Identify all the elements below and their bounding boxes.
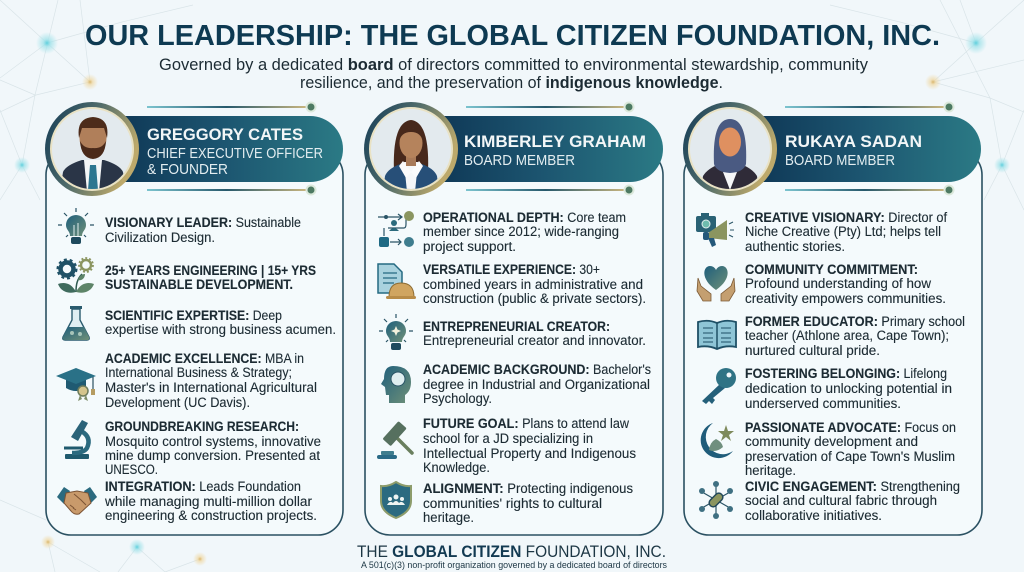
text: academic background	[423, 362, 651, 406]
text: groundbreaking research	[105, 419, 321, 477]
text: academic background: Psychology.	[423, 391, 492, 406]
text: fostering belonging	[745, 366, 952, 411]
text: academic excellence	[105, 351, 317, 410]
text: versatile experience: VERSATILE EXPERIENCE: 30+	[423, 262, 600, 277]
subtitle: resilience, and the preservation of indigenous knowledge.	[300, 73, 723, 92]
text: former educator: teacher (Athlone area, Cape Town);	[745, 328, 949, 343]
icon: microscope	[64, 420, 89, 459]
bullet: civic engagement	[699, 479, 960, 523]
text: versatile experience	[423, 262, 646, 306]
text: entrepreneurial creator	[423, 319, 646, 348]
icon: heart in hands	[697, 266, 735, 301]
text: passionate advocate: heritage.	[745, 463, 796, 478]
text: future goal: school for a JD specializing in	[423, 431, 593, 446]
text: academic background: degree in Industrial and Organizational	[423, 377, 650, 392]
text: groundbreaking research: GROUNDBREAKING RESEARCH:	[105, 419, 299, 434]
footer: THE GLOBAL CITIZEN FOUNDATION, INC.	[357, 542, 666, 561]
text: groundbreaking research: UNESCO.	[105, 462, 158, 477]
subtitle: Governed by a dedicated board of directors committed to environmental stewardship, community	[159, 55, 868, 74]
bullet: creative visionary	[696, 210, 947, 254]
text: creative visionary: CREATIVE VISIONARY: Director of	[745, 210, 947, 225]
icon: flask	[63, 306, 89, 340]
text: community commitment	[745, 262, 946, 306]
text: entrepreneurial creator: Entrepreneurial creator and innovator.	[423, 333, 646, 348]
text: visionary leader: Civilization Design.	[105, 230, 215, 245]
text: civic engagement: collaborative initiatives.	[745, 508, 882, 523]
text: academic background: ACADEMIC BACKGROUND: Bachelor's	[423, 362, 651, 377]
header banner: & FOUNDER	[147, 161, 228, 178]
text: community commitment: COMMUNITY COMMITMENT:	[745, 262, 918, 277]
bullet: academic excellence	[56, 351, 317, 410]
bullet: engineering years	[58, 258, 316, 293]
bullet: future goal	[377, 416, 636, 475]
text: passionate advocate: preservation of Cape Town's Muslim	[745, 449, 955, 464]
header banner: BOARD MEMBER	[785, 152, 895, 169]
text: groundbreaking research: Mosquito control systems, innovative	[105, 434, 321, 449]
header banner: BOARD MEMBER	[464, 152, 575, 169]
icon: shield	[381, 482, 411, 518]
icon: light bulb	[58, 208, 94, 244]
text: integration: engineering & construction projects.	[105, 508, 317, 523]
panel: Rukaya Sadan	[683, 102, 982, 535]
text: future goal	[423, 416, 636, 475]
text: integration	[104, 479, 317, 523]
icon: head with brain	[381, 366, 411, 403]
text: community commitment: Profound understanding of how	[745, 276, 931, 291]
text: academic excellence: Master's in International Agricultural	[105, 380, 317, 395]
panel: Greggory Cates	[45, 102, 343, 535]
icon: camera and megaphone	[696, 213, 734, 247]
text: academic excellence: International Business & Strategy;	[105, 365, 292, 380]
portrait: Rukaya Sadan	[683, 102, 777, 196]
text: academic excellence: ACADEMIC EXCELLENCE: MBA in	[105, 351, 304, 366]
header banner: KIMBERLEY GRAHAM	[464, 133, 646, 151]
text: community commitment: creativity empowers communities.	[745, 291, 946, 306]
portrait: Greggory Cates	[45, 102, 139, 196]
text: groundbreaking research: mine dump conversion. Presented at	[105, 448, 320, 463]
text: alignment: communities' rights to cultural	[423, 496, 602, 511]
icon: light bulb with spark	[379, 314, 413, 350]
icon: workflow	[378, 211, 414, 247]
header banner: RUKAYA SADAN	[785, 133, 922, 151]
title: OUR LEADERSHIP: THE GLOBAL CITIZEN FOUNDATION, INC.	[85, 20, 940, 52]
text: operational depth: member since 2012; wide-ranging	[423, 224, 619, 239]
text: fostering belonging: dedication to unlocking potential in	[745, 381, 952, 396]
header banner	[444, 102, 663, 196]
text: former educator	[745, 314, 965, 358]
icon: connected nodes	[699, 481, 733, 519]
bullet: fostering belonging	[702, 366, 952, 411]
text: fostering belonging: underserved communities.	[745, 396, 901, 411]
text: alignment: ALIGNMENT: Protecting indigenous	[423, 481, 633, 496]
text: civic engagement	[745, 479, 960, 523]
text: former educator: FORMER EDUCATOR: Primary school	[745, 314, 965, 329]
bullet: entrepreneurial creator	[379, 314, 646, 350]
icon: key	[702, 368, 736, 404]
subtitle	[159, 55, 868, 92]
bullet: versatile experience	[378, 262, 646, 306]
text: civic engagement: social and cultural fabric through	[745, 493, 937, 508]
bullet: former educator	[698, 314, 965, 358]
text: operational depth: project support.	[423, 239, 516, 254]
text: civic engagement: CIVIC ENGAGEMENT: Strengthening	[745, 479, 960, 494]
header banner: CHIEF EXECUTIVE OFFICER	[147, 145, 323, 162]
bullet: alignment	[381, 481, 633, 525]
text: visionary leader: VISIONARY LEADER: Sustainable	[105, 215, 301, 230]
text: scientific expertise: SCIENTIFIC EXPERTISE: Deep	[105, 308, 282, 323]
text: creative visionary: authentic stories.	[745, 239, 845, 254]
text: former educator: nurtured cultural pride.	[745, 343, 880, 358]
text: passionate advocate: PASSIONATE ADVOCATE: Focus on	[745, 420, 956, 435]
text: passionate advocate: community development and	[745, 434, 918, 449]
icon: gavel	[377, 421, 412, 459]
text: engineering years: 25+ YEARS ENGINEERING | 15+ YRS	[105, 263, 316, 278]
text: integration: INTEGRATION: Leads Foundation	[105, 479, 301, 494]
text: operational depth: OPERATIONAL DEPTH: Core team	[423, 210, 626, 225]
footer: A 501(c)(3) non-profit organization governed by a dedicated board of directors	[361, 560, 667, 570]
text: engineering years: SUSTAINABLE DEVELOPMENT.	[105, 277, 293, 292]
text: scientific expertise	[105, 308, 336, 337]
footer	[357, 542, 667, 570]
text: visionary leader	[105, 215, 301, 245]
text: integration: while managing multi-million dollar	[104, 494, 312, 509]
text: operational depth	[423, 210, 626, 254]
text: creative visionary: Niche Creative (Pty) Ltd; helps tell	[745, 224, 941, 239]
text: academic excellence: Development (UC Davis).	[105, 395, 250, 410]
text: alignment: heritage.	[423, 510, 474, 525]
bullet: scientific expertise	[63, 306, 336, 340]
bullet: academic background	[381, 362, 651, 406]
icon: graduation cap	[56, 368, 96, 401]
text: scientific expertise: expertise with strong business acumen.	[105, 322, 336, 337]
text: engineering years	[105, 263, 316, 292]
bullet: operational depth	[378, 210, 626, 254]
bullet: visionary leader	[58, 208, 301, 245]
text: versatile experience: combined years in administrative and	[423, 277, 643, 292]
icon: handshake	[57, 487, 97, 514]
text: future goal: Knowledge.	[423, 460, 490, 475]
icon: open book	[698, 321, 736, 349]
text: future goal: FUTURE GOAL: Plans to attend law	[423, 416, 629, 431]
bullet: passionate advocate	[701, 420, 956, 478]
text: creative visionary	[745, 210, 947, 254]
header banner	[125, 102, 343, 196]
text: fostering belonging: FOSTERING BELONGING: Lifelong	[745, 366, 947, 381]
icon: gears and plant	[58, 258, 94, 293]
text: entrepreneurial creator: ENTREPRENEURIAL CREATOR:	[423, 319, 610, 334]
portrait: Kimberley Graham	[364, 102, 458, 196]
text: passionate advocate	[745, 420, 956, 478]
text: versatile experience: construction (public & private sectors).	[423, 291, 646, 306]
bullet: integration	[57, 479, 317, 523]
icon: document and helmet	[378, 264, 416, 299]
header banner: GREGGORY CATES	[147, 126, 303, 144]
text: future goal: Intellectual Property and Indigenous	[423, 446, 636, 461]
icon: crescent and star	[701, 423, 734, 458]
bullet: groundbreaking research	[64, 419, 321, 477]
text: alignment	[423, 481, 633, 525]
bullet: community commitment	[697, 262, 946, 306]
header banner	[763, 102, 981, 196]
panel: Kimberley Graham	[364, 102, 663, 535]
